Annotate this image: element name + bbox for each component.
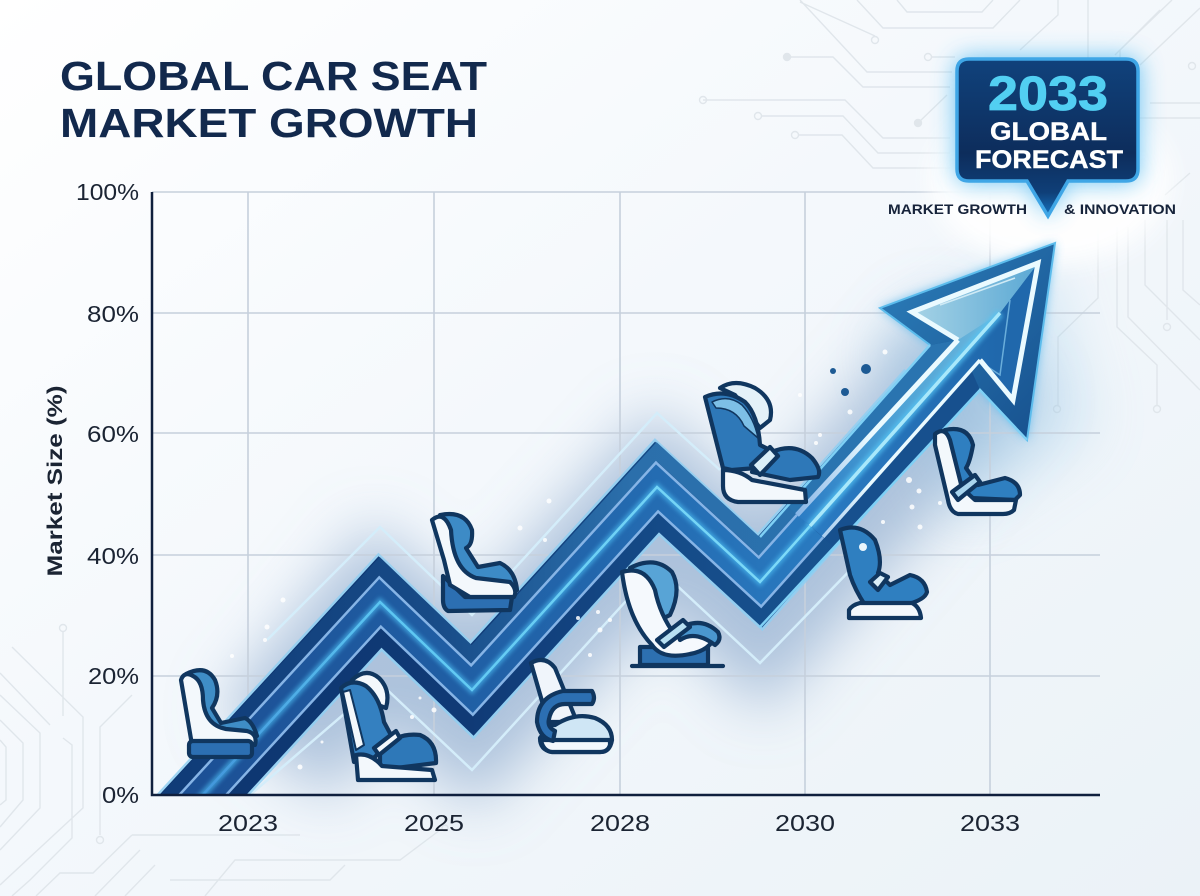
y axis labels <box>76 179 139 808</box>
callout: 2033 global forecast <box>955 57 1140 217</box>
circuit pattern: bottom left <box>0 624 448 896</box>
title: MARKET GROWTH <box>60 100 478 146</box>
seat icon 5 <box>622 562 723 666</box>
y axis labels: 0% <box>102 782 139 808</box>
seat icon 8 <box>935 429 1020 514</box>
seat icon 7 <box>840 528 927 618</box>
x axis labels: 2023 <box>218 810 278 836</box>
seat icon 1 <box>181 670 257 757</box>
sparkle particles <box>230 350 942 770</box>
callout caption: MARKET GROWTH <box>888 201 1027 217</box>
chart grid lines <box>152 192 1100 795</box>
blue dots near arrow <box>830 364 871 396</box>
seat icon 3 <box>432 514 517 611</box>
seat icon 6 <box>705 383 819 502</box>
seat icon 4 <box>531 660 612 752</box>
title <box>60 53 487 146</box>
y axis labels: 20% <box>88 663 139 689</box>
y axis labels: 80% <box>87 301 139 327</box>
callout: 2033 global forecast: 2033 <box>988 68 1108 121</box>
x axis labels <box>218 810 1020 836</box>
circuit pattern: top right <box>700 0 1200 412</box>
white glow around callout and arrow tip <box>930 95 1170 265</box>
x axis labels: 2030 <box>775 810 835 836</box>
x axis labels: 2028 <box>590 810 650 836</box>
callout caption <box>888 201 1176 217</box>
ghost outline lines <box>250 413 860 795</box>
x axis labels: 2033 <box>960 810 1020 836</box>
y axis labels: 60% <box>87 421 139 447</box>
seat icon 2 <box>341 673 436 780</box>
zigzag band <box>157 369 906 794</box>
growth zigzag arrow <box>157 194 1062 794</box>
final shaft section joined to the head <box>760 263 1038 627</box>
x axis labels: 2025 <box>404 810 464 836</box>
y axis labels: 40% <box>87 543 139 569</box>
title: GLOBAL CAR SEAT <box>60 53 487 99</box>
axes <box>152 192 1100 795</box>
callout caption: & INNOVATION <box>1064 201 1176 217</box>
seat icons <box>181 383 1020 780</box>
y axis title: Market Size (%) <box>44 386 67 576</box>
callout: 2033 global forecast: FORECAST <box>975 146 1123 174</box>
y axis labels: 100% <box>76 179 139 205</box>
soft blue glow behind the growth arrow <box>275 250 1090 755</box>
arrow head <box>880 243 1055 440</box>
callout: 2033 global forecast: GLOBAL <box>990 118 1107 146</box>
